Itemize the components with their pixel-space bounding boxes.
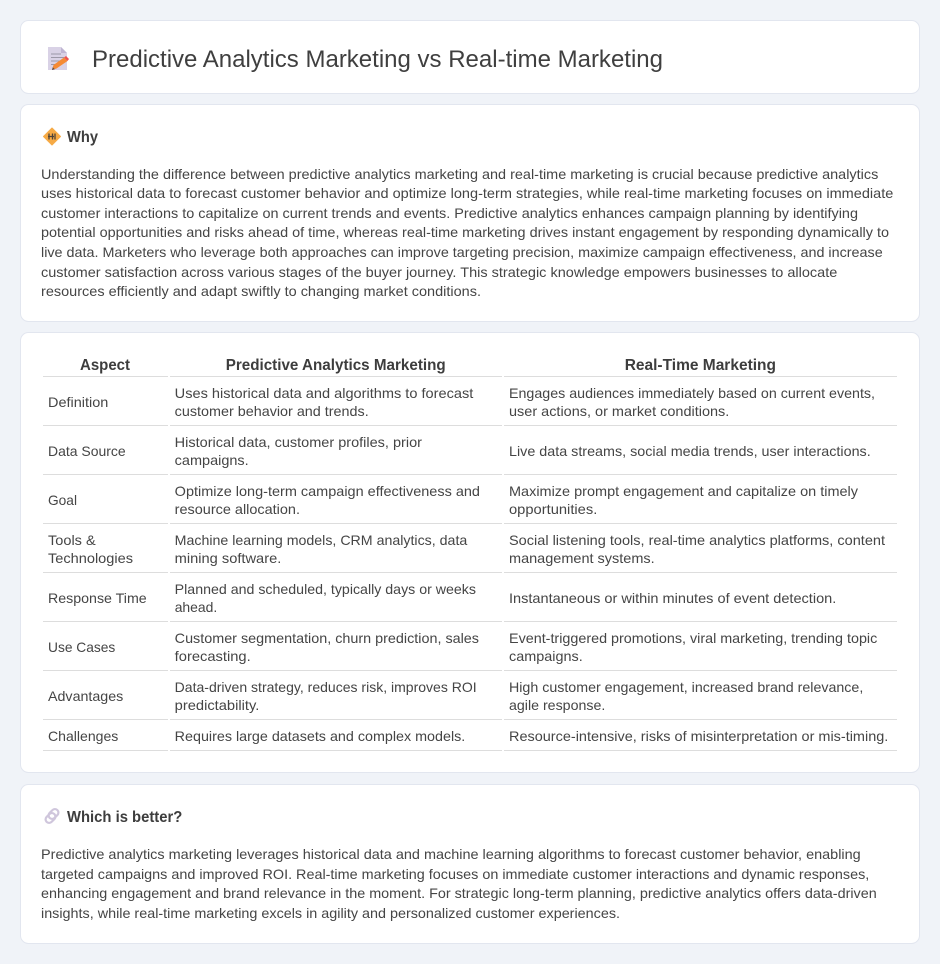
table header row: Real-Time Marketing (625, 357, 776, 374)
table row: definition: Definition (48, 394, 108, 410)
text block: why explanation: uses historical data to forecast customer behavior and optimize long-term strategies, while real-time marketing focuses on immediate (41, 185, 894, 201)
table row: definition: customer behavior and trends. (175, 403, 369, 419)
table row: challenges (48, 728, 888, 744)
table row: response time: Instantaneous or within minutes of event detection. (509, 590, 836, 606)
table row: use cases: Customer segmentation, churn prediction, sales (175, 630, 479, 646)
panel: title header (20, 20, 920, 94)
text block: why explanation: Understanding the difference between predictive analytics marketing and real-time marketing is crucial because predictive analytics (41, 166, 878, 182)
panel: why (20, 104, 920, 322)
heading: why: Why (67, 129, 98, 146)
table row: tools and technologies: Machine learning models, CRM analytics, data (175, 532, 468, 548)
text block: why explanation (41, 166, 894, 299)
table row: data source: campaigns. (175, 452, 249, 468)
table row: use cases (48, 630, 877, 664)
table row: definition (48, 385, 875, 419)
table row: definition: user actions, or market conditions. (509, 403, 729, 419)
table row: goal: resource allocation. (175, 501, 300, 517)
table row: use cases: campaigns. (509, 648, 583, 664)
table row: tools and technologies: mining software. (175, 550, 281, 566)
text block: why explanation: customer interactions to capitalize on current trends and events. Predictive analytics enhances campaign planning by identifying (41, 205, 858, 221)
table row: goal: opportunities. (509, 501, 597, 517)
table row: data source: Historical data, customer profiles, prior (175, 434, 422, 450)
table row: challenges: Challenges (48, 728, 118, 744)
table row: response time: ahead. (175, 599, 217, 615)
table row: challenges: Requires large datasets and complex models. (175, 728, 465, 744)
table row: advantages (48, 679, 863, 713)
table row: definition: Engages audiences immediately based on current events, (509, 385, 875, 401)
table row: response time (48, 581, 836, 615)
text block: verdict: targeted campaigns and improved ROI. Real-time marketing focuses on immediate customer interactions and dynamic responses, (41, 866, 869, 882)
icon: document with pencil (48, 47, 69, 70)
table row: challenges: Resource-intensive, risks of misinterpretation or mis-timing. (509, 728, 888, 744)
table row: advantages: Data-driven strategy, reduces risk, improves ROI (175, 679, 477, 695)
heading: which is better: Which is better? (67, 809, 182, 826)
table row: tools and technologies (48, 532, 885, 566)
table row: response time: Response Time (48, 590, 147, 606)
panel: which is better (20, 784, 920, 944)
table row: goal: Maximize prompt engagement and capitalize on timely (509, 483, 858, 499)
table row: use cases: Event-triggered promotions, viral marketing, trending topic (509, 630, 877, 646)
table row: tools and technologies: Social listening tools, real-time analytics platforms, content (509, 532, 885, 548)
table row: tools and technologies: management systems. (509, 550, 655, 566)
text block: verdict: Predictive analytics marketing leverages historical data and machine learning algorithms to forecast customer behavior, enabling (41, 846, 861, 862)
table row: advantages: High customer engagement, increased brand relevance, (509, 679, 863, 695)
table row: use cases: Use Cases (48, 639, 115, 655)
table row: data source: Data Source (48, 443, 126, 459)
table row: goal (48, 483, 858, 517)
table header row: Aspect (80, 357, 131, 374)
text block: verdict: insights, while real-time marketing excels in agility and personalized customer experiences. (41, 905, 620, 921)
table row: tools and technologies: Tools & (48, 532, 96, 548)
text block: why explanation: customer satisfaction across various stages of the buyer journey. This strategic knowledge empowers businesses to allocate (41, 264, 838, 280)
table header row: Predictive Analytics Marketing (226, 357, 446, 374)
table row: goal: Optimize long-term campaign effectiveness and (175, 483, 480, 499)
table row: advantages: agile response. (509, 697, 605, 713)
panel: comparison table (20, 332, 920, 772)
icon: warning diamond (44, 128, 60, 145)
table row: data source (48, 434, 871, 468)
table row: data source: Live data streams, social media trends, user interactions. (509, 443, 871, 459)
text block: why explanation: live data. Marketers who leverage both approaches can improve targeting precision, maximize campaign effectiveness, and increase (41, 244, 883, 260)
icon: chain link (44, 808, 60, 824)
text block: why explanation: resources efficiently and adapt swiftly to changing market conditions. (41, 283, 481, 299)
text block: why explanation: potential opportunities and risks ahead of time, whereas real-time marketing drives instant engagement by responding dynamically to (41, 224, 889, 240)
table row: goal: Goal (48, 492, 77, 508)
table row: definition: Uses historical data and algorithms to forecast (175, 385, 473, 401)
table row: advantages: Advantages (48, 688, 123, 704)
table row: response time: Planned and scheduled, typically days or weeks (175, 581, 476, 597)
title: Predictive Analytics Marketing vs Real-time Marketing (92, 46, 663, 73)
text block: verdict: enhancing engagement and brand relevance in the moment. For strategic long-term planning, predictive analytics offers data-driven (41, 885, 877, 901)
table header row (80, 357, 776, 374)
table row: tools and technologies: Technologies (48, 550, 133, 566)
table row: use cases: forecasting. (175, 648, 251, 664)
table row: advantages: predictability. (175, 697, 259, 713)
text block: verdict (41, 846, 877, 921)
